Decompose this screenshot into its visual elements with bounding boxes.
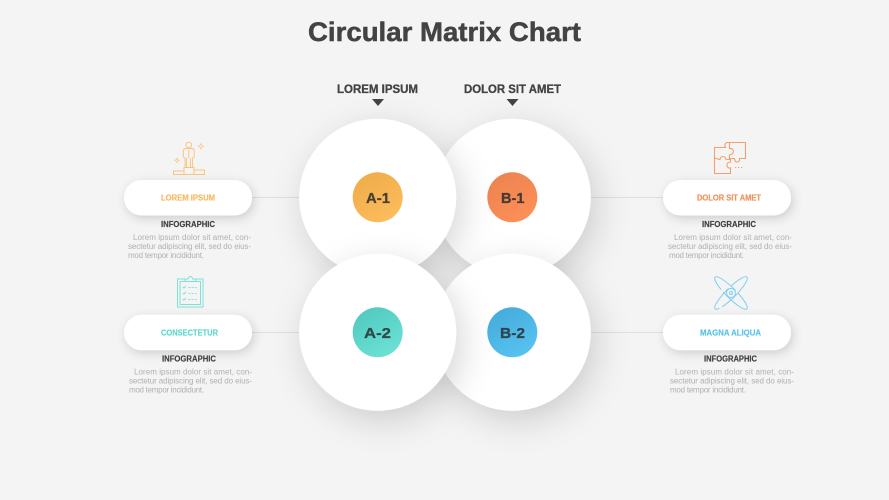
pill: lorem ipsum: LOREM IPSUM (161, 194, 215, 202)
text block: mod tempor incididunt. (129, 386, 204, 394)
panel: lorem ipsum (124, 142, 252, 260)
heading: infographic: INFOGRAPHIC (162, 354, 216, 364)
circle: A-1 (299, 119, 456, 276)
circle: A-1: A-1 (366, 190, 390, 207)
icon: atom (712, 274, 750, 312)
heading: infographic: INFOGRAPHIC (702, 220, 756, 229)
heading: infographic: INFOGRAPHIC (704, 354, 757, 364)
circle: A-2: A-2 (364, 325, 391, 342)
text block: Lorem ipsum dolor sit amet, con- (675, 368, 794, 376)
circle: B-2: B-2 (500, 325, 525, 342)
pill: consectetur: CONSECTETUR (161, 328, 218, 338)
text block: sectetur adipiscing elit, sed do eius- (670, 376, 794, 386)
title: Circular Matrix Chart (308, 17, 581, 47)
text block (670, 368, 794, 394)
pill: magna aliqua: MAGNA ALIQUA (700, 328, 761, 338)
text block: mod tempor incididunt. (669, 251, 744, 260)
heading: infographic: INFOGRAPHIC (161, 220, 215, 229)
matrix circles (299, 119, 591, 411)
column header: lorem ipsum: LOREM IPSUM (337, 84, 418, 96)
circle: B-2 (434, 254, 591, 411)
text block: sectetur adipiscing elit, sed do eius- (129, 376, 252, 386)
text block: mod tempor incididunt. (670, 386, 746, 394)
pill: dolor sit amet: DOLOR SIT AMET (697, 194, 761, 202)
text block: Lorem ipsum dolor sit amet, con- (674, 233, 792, 242)
text block: sectetur adipiscing elit, sed do eius- (668, 242, 792, 251)
text block: mod tempor incididunt. (128, 251, 204, 260)
text block (128, 233, 251, 260)
column header: dolor sit amet: DOLOR SIT AMET (464, 84, 561, 96)
icon: person on podium (174, 142, 204, 174)
connector lines (250, 198, 665, 332)
text block (129, 368, 252, 394)
icon: puzzle (714, 142, 746, 174)
panel: consectetur (124, 276, 252, 394)
panel: magna aliqua (663, 274, 794, 394)
icon: clipboard checklist (178, 276, 203, 307)
circle: B-1: B-1 (501, 190, 524, 207)
column header: lorem ipsum (337, 84, 418, 106)
panel: dolor sit amet (663, 142, 792, 260)
text block: Lorem ipsum dolor sit amet, con- (133, 233, 251, 242)
text block: sectetur adipiscing elit, sed do eius- (128, 242, 251, 251)
column header: dolor sit amet (464, 84, 561, 106)
circle: B-1 (434, 119, 591, 276)
circle: A-2 (299, 254, 456, 411)
text block: Lorem ipsum dolor sit amet, con- (134, 368, 252, 376)
text block (668, 233, 792, 260)
